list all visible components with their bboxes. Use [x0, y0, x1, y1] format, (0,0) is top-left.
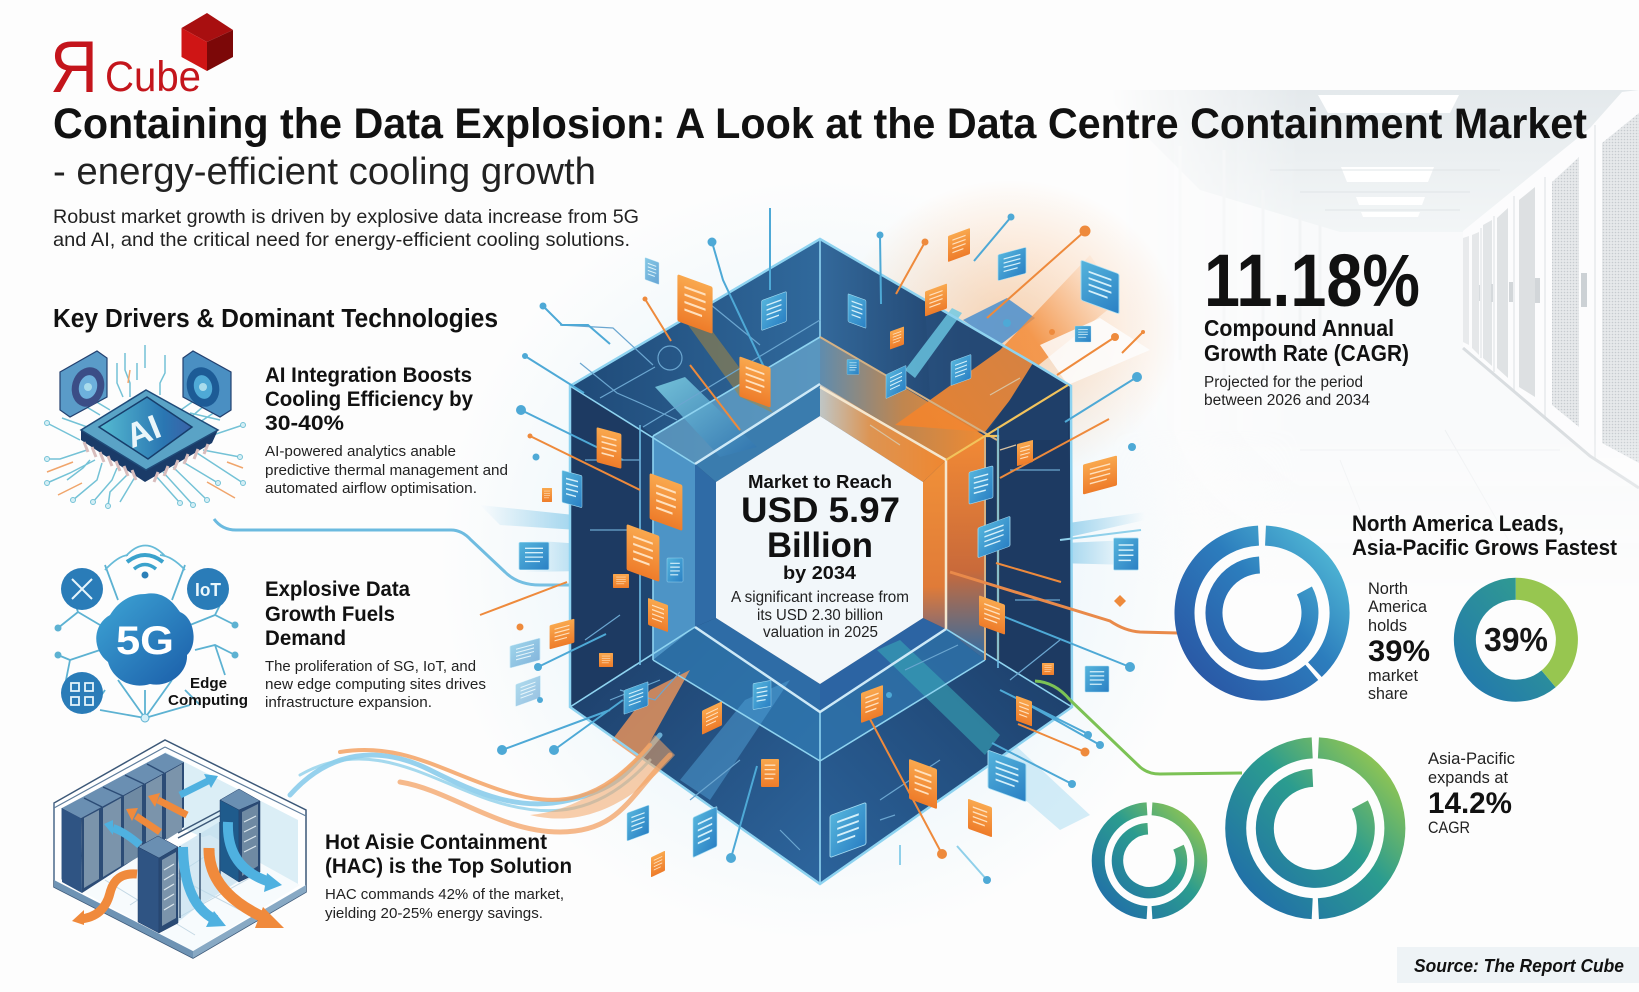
market callout text: [731, 471, 909, 641]
text: Asia-Pacific CAGR: 14.2%: [1428, 787, 1512, 820]
market callout text: Billion: [767, 526, 873, 565]
background: data centre hallway: [1170, 90, 1639, 505]
heading: regional: [1352, 511, 1618, 560]
text: explosive data: Growth Fuels: [265, 603, 395, 626]
CAGR stat: Projected for the period: [1204, 374, 1363, 391]
text: explosive data: new edge computing sites drives: [265, 676, 486, 693]
CAGR stat: 11.18%: [1204, 239, 1420, 322]
text: explosive data: The proliferation of SG, IoT, and: [265, 658, 476, 675]
icon: 5G cloud network: IoT: [195, 580, 221, 600]
text: explosive data: infrastructure expansion.: [265, 694, 432, 711]
text: North America share: market: [1368, 667, 1418, 685]
radiating lines: [502, 208, 1141, 880]
text: explosive data: Explosive Data: [265, 578, 410, 601]
source box: Source: The Report Cube: [1414, 956, 1624, 976]
hexagon faces: [570, 239, 1150, 884]
text: AI integration: 30-40%: [265, 412, 344, 435]
text: North America share: 39%: [1368, 635, 1430, 668]
label: edge computing: Edge: [190, 675, 227, 692]
chart: 39% donut: [1465, 589, 1567, 691]
icon: AI chip with fans: [44, 345, 246, 508]
text: hot aisle containment: yielding 20-25% energy savings.: [325, 905, 543, 922]
back row racks: [62, 753, 184, 893]
market callout text: A significant increase from: [731, 589, 909, 606]
light rays: [480, 505, 1145, 830]
connector: green line to Asia-Pacific: [1035, 681, 1242, 774]
connector: blue line from data growth: [214, 519, 575, 585]
heading: key drivers: Key Drivers & Dominant Technologies: [53, 305, 498, 333]
market callout text: valuation in 2025: [763, 624, 878, 641]
intro text: Robust market growth is driven by explosive data increase from 5G: [53, 206, 639, 228]
glass containment: [178, 810, 239, 922]
driver 3: hot aisle containment: [54, 740, 572, 958]
centre panel: [716, 416, 923, 684]
market callout text: USD 5.97: [741, 491, 900, 530]
text: hot aisle containment: Hot Aisie Containment: [325, 830, 547, 854]
text: AI integration: [265, 364, 508, 497]
logo: [50, 13, 233, 108]
airflow arrows: [72, 774, 284, 928]
source box: [1397, 947, 1639, 983]
text: North America share: North: [1368, 580, 1408, 598]
text: hot aisle containment: (HAC) is the Top Solution: [325, 854, 572, 878]
text: AI integration: automated airflow optimisation.: [265, 480, 477, 497]
CAGR stat: [1204, 239, 1420, 409]
blue data cards: [510, 247, 1138, 858]
text: Asia-Pacific CAGR: expands at: [1428, 769, 1508, 787]
front racks: [138, 789, 260, 933]
market callout text: its USD 2.30 billion: [757, 607, 883, 624]
title: Containing the Data Explosion: A Look at the Data Centre Containment Market: [53, 100, 1587, 148]
subtitle: - energy-efficient cooling growth: [53, 151, 596, 193]
CAGR stat: Growth Rate (CAGR): [1204, 340, 1409, 366]
market callout text: by 2034: [783, 563, 856, 583]
text: AI integration: Cooling Efficiency by: [265, 388, 473, 411]
icon: isometric containment room: [54, 740, 306, 958]
text: explosive data: Demand: [265, 627, 346, 650]
text: AI integration: AI Integration Boosts: [265, 364, 472, 387]
text: Asia-Pacific CAGR: [1428, 750, 1515, 837]
upper-right burst: [925, 300, 1033, 436]
market callout text: Market to Reach: [748, 471, 892, 492]
driver 2: data growth: [54, 546, 486, 722]
heading: regional: Asia-Pacific Grows Fastest: [1352, 535, 1618, 560]
text: North America share: holds: [1368, 617, 1407, 635]
swooshes toward HAC: [290, 735, 675, 832]
text: North America share: America: [1368, 598, 1428, 616]
text: Asia-Pacific CAGR: CAGR: [1428, 819, 1470, 837]
wedges on faces: [655, 377, 757, 457]
logo: Cube: [105, 53, 201, 101]
text: hot aisle containment: [325, 830, 572, 922]
CAGR stat: Compound Annual: [1204, 315, 1394, 341]
logo: Я: [50, 27, 98, 108]
text: North America share: [1368, 580, 1430, 703]
CAGR stat: between 2026 and 2034: [1204, 392, 1370, 409]
text: hot aisle containment: HAC commands 42% of the market,: [325, 886, 564, 903]
central hexagon graphic: [440, 180, 1200, 940]
label: edge computing: Computing: [168, 692, 248, 709]
icon: 5G cloud network: [54, 546, 238, 722]
chart: Asia-Pacific large rings: [1236, 748, 1395, 909]
text: AI integration: AI-powered analytics anable: [265, 443, 456, 460]
icon: 5G cloud network: 5G: [116, 619, 174, 663]
text: AI integration: predictive thermal management and: [265, 462, 508, 479]
heading: regional: North America Leads,: [1352, 511, 1564, 536]
hexagon wireframe: [560, 239, 1072, 884]
chart: Asia-Pacific small rings: [1098, 809, 1201, 913]
line end dots: [497, 214, 1145, 884]
label: edge computing: [168, 675, 248, 709]
intro text: and AI, and the critical need for energy-efficient cooling solutions.: [53, 229, 630, 251]
orange data cards: [542, 228, 1117, 877]
text: Asia-Pacific CAGR: Asia-Pacific: [1428, 750, 1515, 768]
driver 1: AI: [44, 345, 508, 508]
chart: North America concentric rings: [1184, 536, 1340, 691]
connector: orange line to North America: [950, 572, 1178, 633]
text: explosive data: [265, 578, 486, 711]
intro text: [53, 206, 639, 251]
chart: 39% donut: 39%: [1484, 621, 1548, 658]
icon: AI chip with fans: AI: [120, 408, 166, 456]
text: North America share: share: [1368, 685, 1408, 703]
